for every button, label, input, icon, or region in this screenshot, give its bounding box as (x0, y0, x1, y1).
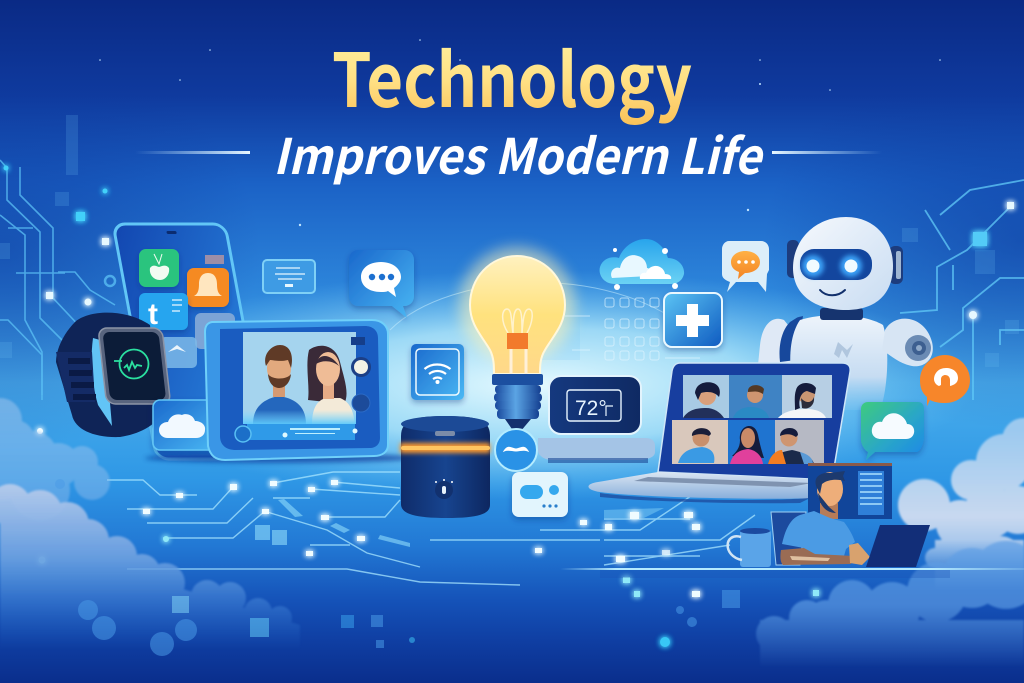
small device tile (512, 472, 568, 517)
participant 3 (778, 383, 826, 418)
title (273, 22, 765, 189)
smartwatch (56, 313, 171, 437)
background stars (99, 39, 941, 226)
person: man (253, 345, 306, 424)
robot arm (882, 319, 933, 366)
person laptop (866, 525, 930, 567)
video photo (243, 332, 356, 424)
glowing nodes (4, 166, 1014, 319)
participant 2 (733, 385, 769, 418)
light bulb (459, 247, 575, 432)
watch heart-rate icon (114, 350, 148, 378)
orange chat tile (722, 241, 769, 292)
tablet (205, 320, 388, 460)
app: blue text tile (139, 293, 188, 331)
watch case (98, 328, 171, 404)
clouds bottom right (756, 540, 1024, 660)
cloud icon (600, 239, 684, 290)
title rule right (772, 151, 882, 154)
watch strap (56, 313, 160, 437)
back cloud layer (0, 397, 111, 504)
tablet controls (351, 357, 371, 377)
green cloud bubble (861, 402, 924, 460)
floor glowing nodes (37, 428, 819, 647)
speaker light ring (400, 443, 490, 453)
person: woman (307, 346, 355, 424)
device floor shadow (145, 453, 415, 463)
filament (503, 309, 532, 374)
laptop video call (588, 363, 850, 503)
medical plus tile (664, 293, 722, 347)
floor circuit traces (107, 472, 755, 585)
chat bubble icon (349, 250, 414, 318)
round wave icon (495, 429, 537, 471)
smartphone (113, 224, 269, 459)
person body (780, 471, 870, 565)
subtitle: Improves Modern Life: Improves Modern Life (273, 118, 765, 189)
bulb screw base (492, 374, 543, 432)
thermostat reading: 72° (575, 397, 607, 420)
clouds right (896, 416, 1024, 578)
cloud tile (153, 400, 219, 450)
robot body (758, 315, 887, 410)
icon grid (565, 298, 700, 360)
robot (758, 217, 933, 410)
bokeh dots (55, 479, 740, 656)
floor bars (255, 499, 664, 547)
laptop base (588, 472, 830, 499)
person at desk (560, 463, 1024, 578)
monitor (808, 463, 892, 519)
app: orange (187, 268, 229, 307)
app: chevron tile (160, 337, 197, 368)
orange bubble (920, 355, 970, 406)
app: grey tile (195, 313, 235, 349)
clouds left (0, 397, 300, 634)
app: green (139, 249, 179, 287)
app: blue text tile: t (148, 298, 158, 331)
wifi tile (411, 344, 464, 400)
laptop screen (658, 363, 850, 480)
chair (771, 512, 806, 565)
smart speaker (400, 416, 490, 518)
participant 6 (768, 428, 814, 464)
robot head (793, 217, 893, 310)
circuit lines right (900, 180, 1024, 400)
small label (205, 255, 224, 264)
thermostat (538, 376, 655, 463)
robot visor (800, 249, 872, 280)
faint tech squares (0, 115, 1019, 367)
video grid (672, 375, 832, 464)
participant 5 (730, 426, 764, 464)
title rule left (135, 151, 250, 154)
notification card (263, 260, 315, 293)
heading: Technology: Technology (332, 22, 692, 129)
desk (560, 568, 1024, 578)
front cloud layer (0, 482, 300, 634)
robot ears (787, 240, 903, 284)
coffee mug (728, 528, 771, 567)
circuit lines left (0, 160, 115, 400)
participant 1 (683, 382, 724, 418)
participant 4 (678, 428, 714, 463)
